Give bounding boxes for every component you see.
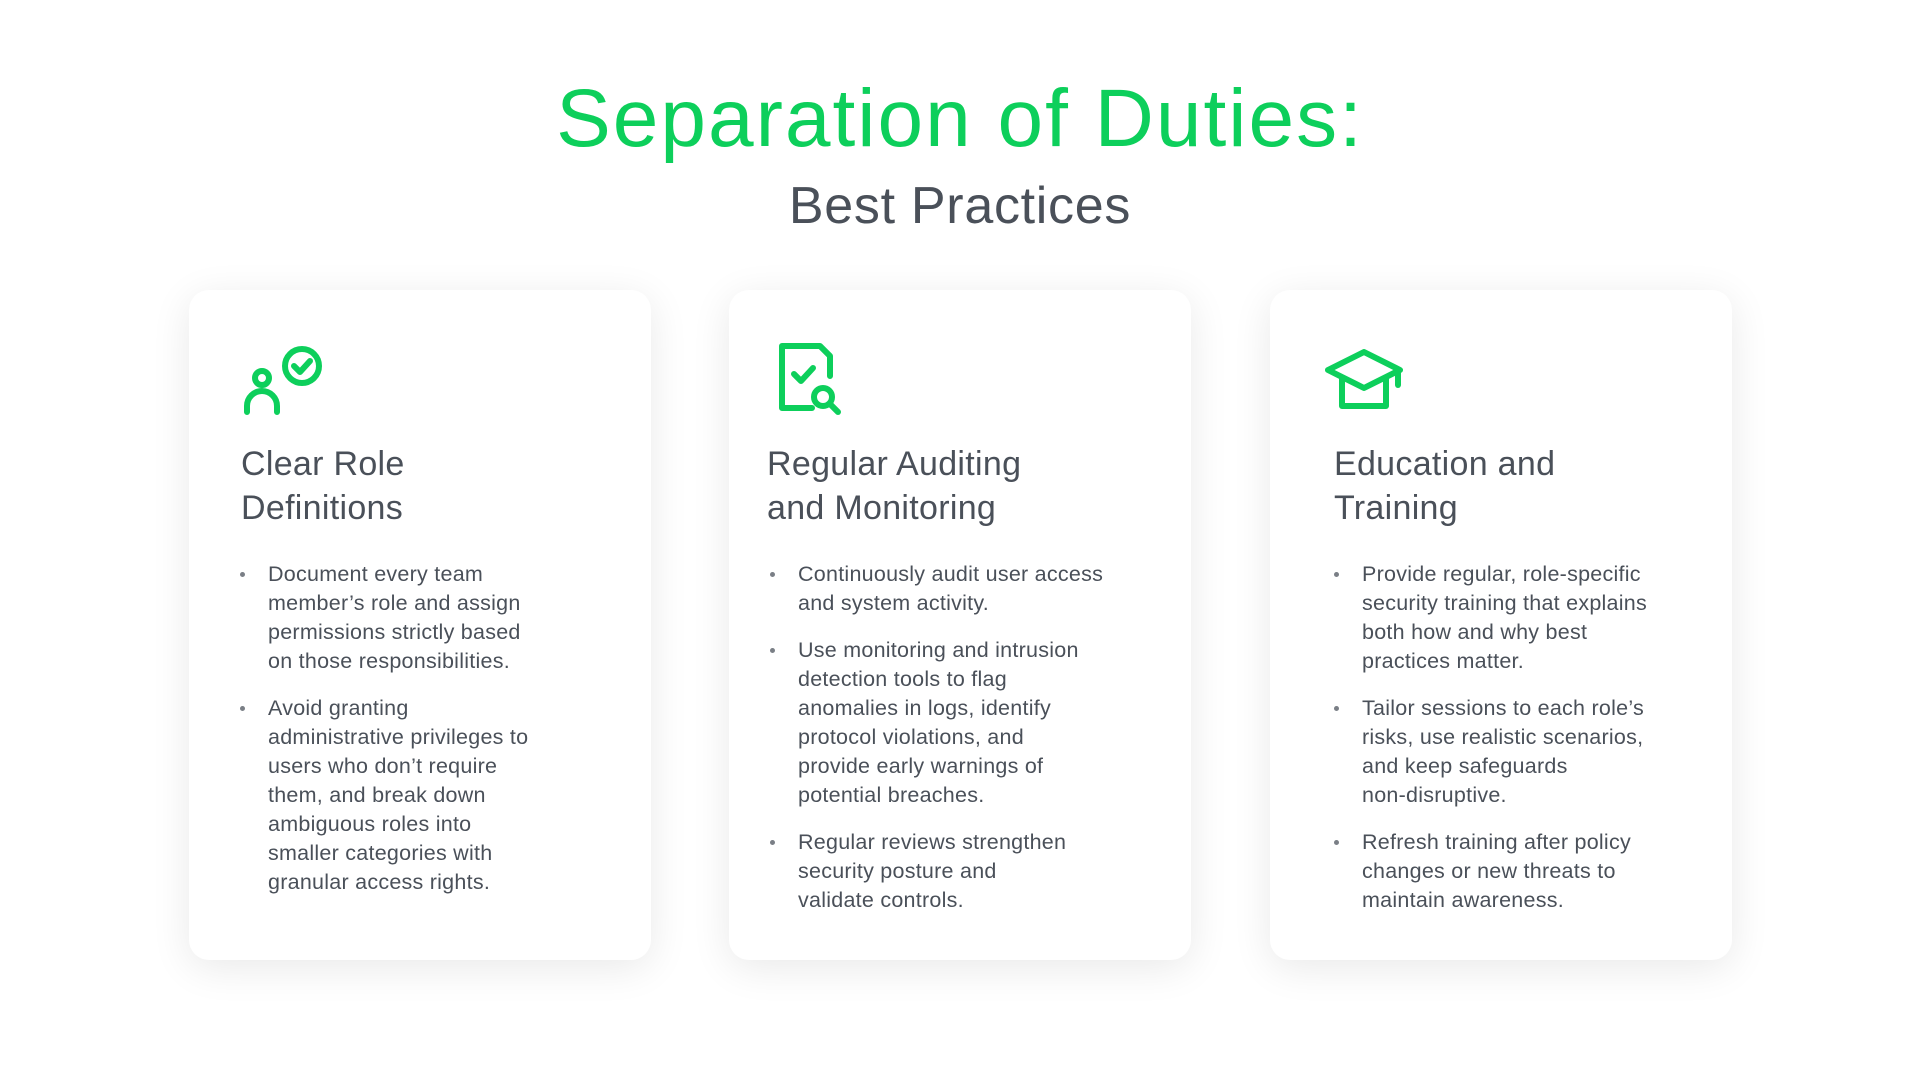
- list: auditing bullets: and system activity.: [798, 591, 989, 615]
- list: clear role bullets: administrative privileges to: [268, 725, 528, 749]
- list: clear role bullets: Document every team: [268, 562, 483, 586]
- list: clear role bullets: [240, 562, 528, 894]
- heading: clear role definitions: Definitions: [241, 489, 403, 527]
- heading: education and training: [1334, 445, 1555, 527]
- panel: clear role definitions: [189, 290, 651, 960]
- list: training bullets: practices matter.: [1362, 649, 1524, 673]
- panel: education and training: [1270, 290, 1732, 960]
- list: training bullets: [1334, 562, 1647, 912]
- panel: regular auditing: [729, 290, 1191, 960]
- list: training bullets: and keep safeguards: [1362, 754, 1568, 778]
- list: clear role bullets: member’s role and assign: [268, 591, 521, 615]
- list: auditing bullets: security posture and: [798, 859, 997, 883]
- list: auditing bullets: potential breaches.: [798, 783, 984, 807]
- list: auditing bullets: detection tools to flag: [798, 667, 1007, 691]
- list: auditing bullets: Use monitoring and intrusion: [798, 638, 1079, 662]
- icon: person with check: [244, 346, 322, 415]
- list: clear role bullets: Avoid granting: [268, 696, 409, 720]
- heading: clear role definitions: [241, 445, 405, 527]
- list: training bullets: Tailor sessions to each role’s: [1362, 696, 1644, 720]
- list: training bullets: risks, use realistic scenarios,: [1362, 725, 1643, 749]
- heading: regular auditing: [767, 445, 1021, 527]
- list: training bullets: security training that explains: [1362, 591, 1647, 615]
- title: Separation of Duties:: [556, 73, 1364, 164]
- list: clear role bullets: smaller categories with: [268, 841, 492, 865]
- subtitle: Best Practices: [789, 177, 1131, 235]
- list: auditing bullets: Regular reviews strengthen: [798, 830, 1066, 854]
- list: clear role bullets: users who don’t require: [268, 754, 497, 778]
- icon: graduation cap: [1325, 349, 1403, 409]
- list: training bullets: changes or new threats to: [1362, 859, 1616, 883]
- list: training bullets: Provide regular, role-specific: [1362, 562, 1641, 586]
- list: auditing bullets: protocol violations, and: [798, 725, 1024, 749]
- list: clear role bullets: permissions strictly based: [268, 620, 521, 644]
- list: training bullets: maintain awareness.: [1362, 888, 1564, 912]
- heading: education and training: Education and: [1334, 445, 1555, 483]
- list: auditing bullets: [770, 562, 1103, 912]
- list: clear role bullets: on those responsibilities.: [268, 649, 510, 673]
- list: auditing bullets: anomalies in logs, identify: [798, 696, 1051, 720]
- heading: regular auditing: Regular Auditing: [767, 445, 1021, 483]
- icon: document with magnifier: [779, 343, 841, 415]
- list: auditing bullets: Continuously audit user access: [798, 562, 1103, 586]
- list: training bullets: non-disruptive.: [1362, 783, 1507, 807]
- list: training bullets: Refresh training after policy: [1362, 830, 1631, 854]
- list: auditing bullets: validate controls.: [798, 888, 964, 912]
- list: auditing bullets: provide early warnings of: [798, 754, 1043, 778]
- list: clear role bullets: ambiguous roles into: [268, 812, 471, 836]
- heading: education and training: Training: [1334, 489, 1458, 527]
- heading: clear role definitions: Clear Role: [241, 445, 405, 483]
- heading: regular auditing: and Monitoring: [767, 489, 996, 527]
- list: training bullets: both how and why best: [1362, 620, 1587, 644]
- list: clear role bullets: granular access rights.: [268, 870, 490, 894]
- list: clear role bullets: them, and break down: [268, 783, 486, 807]
